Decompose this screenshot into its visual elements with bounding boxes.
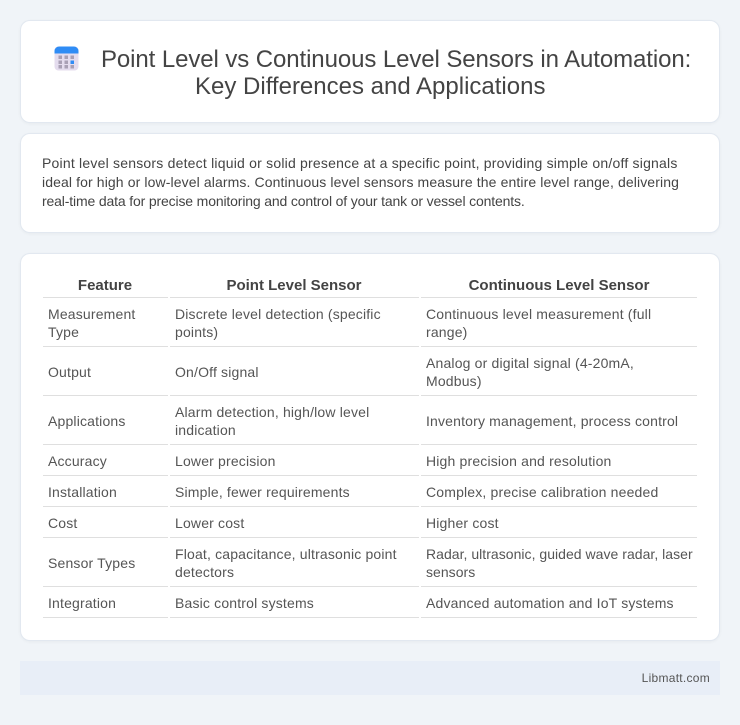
row: Installation: Installation	[48, 484, 117, 500]
table comparison: Basic control systems	[175, 595, 314, 611]
header: Continuous Level Sensor: Continuous Level Sensor	[469, 277, 649, 294]
table comparison: Lower cost	[175, 515, 244, 531]
table comparison: Lower precision	[175, 453, 276, 469]
table comparison	[43, 277, 697, 618]
table comparison: Higher cost	[426, 515, 499, 531]
title line 2: Key Differences and Applications	[195, 73, 545, 100]
table comparison: Alarm detection, high/low level	[175, 404, 369, 420]
intro line 1: Point level sensors detect liquid or solid presence at a specific point, providing simple on/off signals	[42, 155, 678, 171]
row: Measurement Type	[48, 306, 136, 340]
table comparison: points)	[175, 324, 218, 340]
title line 1: Point Level vs Continuous Level Sensors in Automation:	[101, 46, 691, 73]
row: Integration: Integration	[48, 595, 116, 611]
row: Applications: Applications	[48, 413, 126, 429]
footer credit: Libmatt.com	[642, 671, 710, 685]
table comparison: Advanced automation and IoT systems	[426, 595, 674, 611]
table comparison: Simple, fewer requirements	[175, 484, 350, 500]
table comparison: sensors	[426, 564, 475, 580]
intro line 3: real-time data for precise monitoring and control of your tank or vessel contents.	[42, 193, 525, 209]
table comparison: Inventory management, process control	[426, 413, 678, 429]
panel: title card	[20, 20, 720, 123]
table comparison: High precision and resolution	[426, 453, 611, 469]
header: Point Level Sensor: Point Level Sensor	[226, 277, 362, 294]
table comparison: detectors	[175, 564, 234, 580]
panel: comparison table card	[20, 253, 720, 641]
table comparison: Complex, precise calibration needed	[426, 484, 658, 500]
row: Measurement Type: Type	[48, 324, 79, 340]
table comparison: On/Off signal	[175, 364, 259, 380]
header: Feature: Feature	[78, 277, 132, 294]
table comparison: Float, capacitance, ultrasonic point	[175, 546, 397, 562]
table comparison: Continuous level measurement (full	[426, 306, 651, 322]
row: Sensor Types: Sensor Types	[48, 555, 135, 571]
row: Cost: Cost	[48, 515, 77, 531]
footer bar	[20, 661, 720, 695]
table comparison: Radar, ultrasonic, guided wave radar, laser	[426, 546, 693, 562]
row: Measurement Type: Measurement	[48, 306, 135, 322]
row: Output: Output	[48, 364, 91, 380]
table comparison: Modbus)	[426, 373, 482, 389]
icon: calendar	[54, 46, 78, 70]
table comparison: Discrete level detection (specific	[175, 306, 381, 322]
table comparison: Analog or digital signal (4-20mA,	[426, 355, 634, 371]
row: Accuracy: Accuracy	[48, 453, 107, 469]
panel: introduction card	[20, 133, 720, 233]
table comparison: indication	[175, 422, 236, 438]
table comparison: range)	[426, 324, 468, 340]
intro line 2: ideal for high or low-level alarms. Continuous level sensors measure the entire level range, delivering	[42, 174, 679, 190]
